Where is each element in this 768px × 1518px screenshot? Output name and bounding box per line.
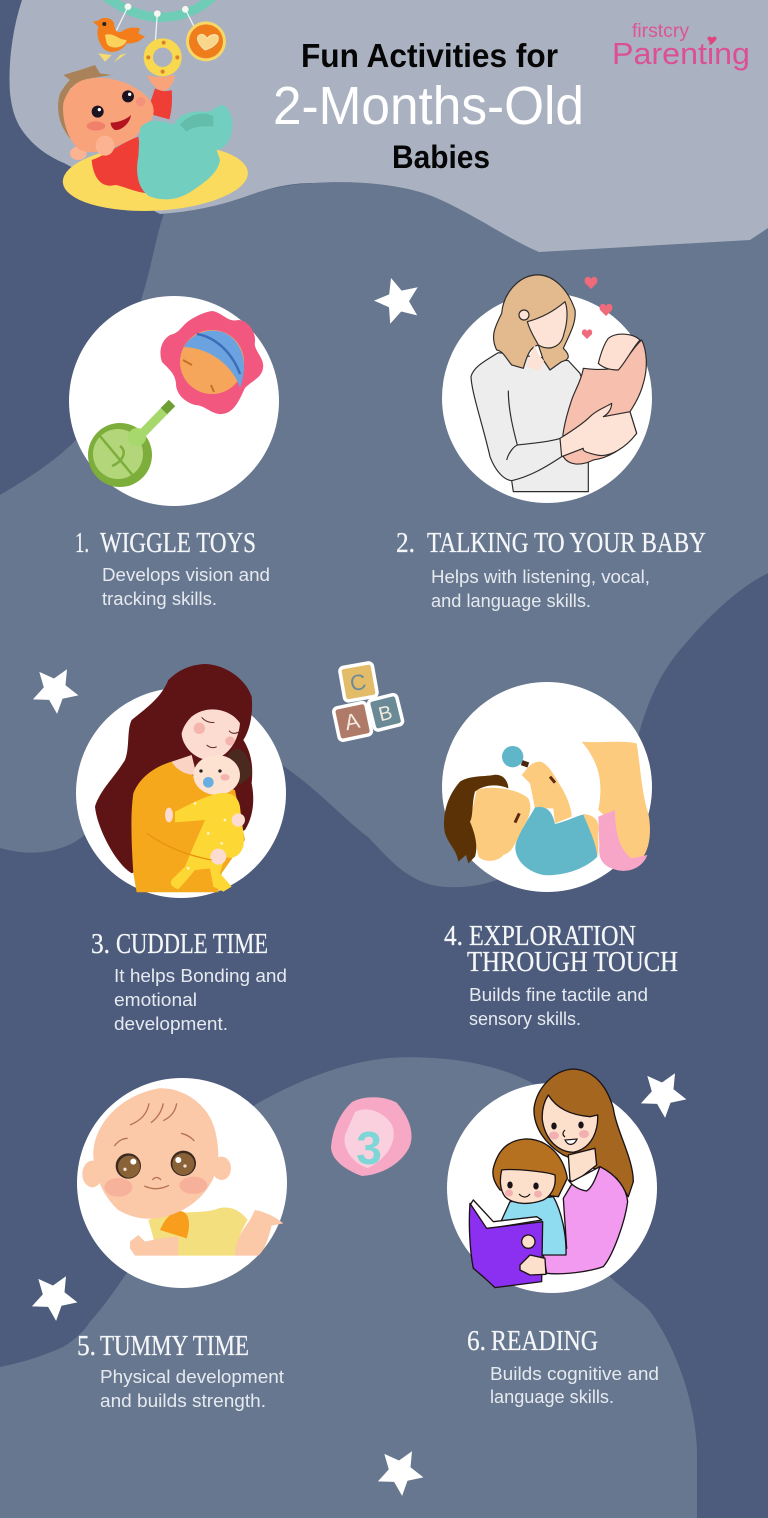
block C: C bbox=[348, 669, 368, 696]
baby head bbox=[193, 755, 240, 795]
hair bbox=[494, 275, 575, 370]
child shirt bbox=[502, 1197, 566, 1255]
description 1: tracking skills. bbox=[102, 589, 217, 609]
head bbox=[63, 78, 154, 152]
description 3: It helps Bonding and bbox=[114, 966, 287, 986]
rattle ball bbox=[502, 746, 523, 767]
icon: star bbox=[33, 669, 78, 714]
leg bbox=[582, 742, 650, 861]
background: upper mid fill bbox=[150, 182, 768, 300]
knee shade bbox=[180, 114, 213, 132]
child hand bbox=[522, 1235, 535, 1248]
circle bbox=[442, 293, 652, 503]
neck bbox=[568, 1148, 597, 1183]
description 5: Physical development bbox=[100, 1367, 284, 1387]
description 4: Builds fine tactile and bbox=[469, 985, 648, 1005]
neck bbox=[172, 755, 197, 775]
description 3: emotional bbox=[114, 990, 197, 1010]
block B: B bbox=[376, 702, 395, 726]
description 6: language skills. bbox=[490, 1387, 614, 1407]
mobile strings bbox=[115, 7, 200, 42]
cheek bbox=[87, 121, 105, 131]
leg bbox=[235, 1210, 283, 1256]
collar bbox=[568, 1167, 600, 1191]
heading 4: 4. bbox=[444, 921, 463, 952]
panel 2: talking to your baby bbox=[396, 275, 706, 611]
hand bbox=[560, 403, 637, 457]
shirt bbox=[515, 807, 597, 875]
rattle bbox=[522, 763, 528, 765]
block A: A bbox=[342, 708, 362, 735]
book bbox=[469, 1203, 543, 1288]
finger shade bbox=[550, 777, 555, 783]
description 3: development. bbox=[114, 1014, 228, 1034]
logo: parenting: Parenting bbox=[612, 36, 750, 71]
icon: star bbox=[374, 278, 418, 324]
baby hair bbox=[227, 749, 252, 785]
head bbox=[470, 788, 530, 861]
heading 5: 5. bbox=[77, 1331, 96, 1362]
heading 3: 3. bbox=[91, 929, 110, 960]
heading 2: TALKING TO YOUR BABY bbox=[427, 528, 706, 559]
cheek right bbox=[136, 97, 145, 106]
face lines bbox=[202, 717, 241, 748]
description 2 bbox=[431, 567, 650, 611]
icon: star bbox=[32, 1276, 77, 1321]
diaper bbox=[598, 810, 647, 871]
sweater bbox=[471, 353, 588, 492]
face bbox=[182, 709, 240, 760]
head bbox=[93, 1088, 218, 1219]
illustration: baby on tummy bbox=[82, 1088, 283, 1256]
legs bbox=[137, 105, 233, 199]
baby features bbox=[199, 769, 230, 788]
icon: alphabet blocks bbox=[333, 662, 403, 741]
mother hand bbox=[520, 1255, 546, 1275]
panel 4: exploration through touch bbox=[442, 682, 678, 1029]
eyes bbox=[116, 1151, 196, 1179]
circle bbox=[442, 682, 652, 892]
hands bbox=[165, 808, 245, 865]
hip bbox=[583, 814, 599, 857]
mother face bbox=[542, 1095, 598, 1152]
heading 3: CUDDLE TIME bbox=[116, 929, 268, 960]
mouth bbox=[515, 813, 519, 823]
heading 6: 6. bbox=[467, 1326, 486, 1357]
child hair bbox=[493, 1139, 567, 1197]
heading 6: READING bbox=[491, 1326, 598, 1357]
hair bbox=[58, 65, 112, 140]
illustration: mother reading with child bbox=[469, 1069, 633, 1288]
description 1: Develops vision and bbox=[102, 565, 270, 585]
logo bbox=[612, 21, 750, 71]
icon: hearts bbox=[582, 277, 612, 339]
die body bbox=[331, 1097, 412, 1176]
hand up bbox=[147, 75, 175, 91]
body bbox=[92, 137, 147, 193]
sweater bbox=[131, 762, 245, 892]
circle bbox=[69, 296, 279, 506]
sleeve bbox=[160, 1211, 189, 1238]
heading 4: EXPLORATION bbox=[469, 921, 636, 952]
panel 5: tummy time bbox=[77, 1078, 287, 1411]
background: lower wave bbox=[0, 1057, 697, 1518]
title line 3: Babies bbox=[392, 139, 490, 175]
blush bbox=[104, 1177, 207, 1197]
illustration: mother and newborn bbox=[471, 275, 646, 492]
toy: heart disc bbox=[186, 21, 226, 61]
shirt bbox=[148, 1207, 248, 1256]
description 6 bbox=[490, 1364, 659, 1407]
description 5: and builds strength. bbox=[100, 1391, 266, 1411]
die face bbox=[345, 1109, 394, 1168]
toy: bird bbox=[93, 18, 145, 62]
panel 6: reading bbox=[447, 1069, 659, 1407]
face lines bbox=[114, 1103, 194, 1189]
die number: 3 bbox=[356, 1122, 382, 1174]
arm up bbox=[150, 88, 172, 119]
arm bbox=[522, 762, 572, 823]
heading 5: TUMMY TIME bbox=[100, 1331, 249, 1362]
heading 1: WIGGLE TOYS bbox=[100, 528, 256, 559]
heading 4: THROUGH TOUCH bbox=[467, 947, 678, 978]
description 1 bbox=[102, 565, 270, 609]
mouth bbox=[111, 115, 131, 130]
panel 3: cuddle time bbox=[76, 664, 287, 1034]
baby body bbox=[171, 793, 244, 892]
panel 1: wiggle toys bbox=[69, 296, 279, 609]
heading 2: 2. bbox=[396, 528, 415, 559]
title bbox=[273, 37, 584, 175]
dots bbox=[187, 802, 226, 870]
book pages bbox=[470, 1200, 542, 1229]
title line 1: Fun Activities for bbox=[301, 37, 558, 74]
toy: ring bbox=[146, 41, 179, 74]
description 3 bbox=[114, 966, 287, 1034]
description 2: and language skills. bbox=[431, 591, 591, 611]
description 5 bbox=[100, 1367, 284, 1411]
circle bbox=[76, 688, 286, 898]
description 4 bbox=[469, 985, 648, 1029]
icon: number die bbox=[331, 1097, 412, 1176]
cheeks bbox=[194, 723, 235, 746]
sweater bbox=[543, 1167, 628, 1274]
heading 4 bbox=[444, 921, 678, 978]
mobile dots bbox=[125, 3, 189, 17]
neck bbox=[526, 345, 544, 371]
arm shadow bbox=[147, 833, 212, 860]
logo: heart bbox=[707, 37, 717, 44]
illustration: baby with mobile bbox=[58, 0, 250, 215]
background: middle wave bbox=[0, 213, 768, 887]
sleeve lines bbox=[507, 391, 562, 481]
cushion bbox=[61, 139, 250, 215]
icon: rattle bbox=[88, 311, 263, 487]
logo: firstcry: firstcry bbox=[632, 21, 690, 42]
child face bbox=[500, 1170, 555, 1203]
description 4: sensory skills. bbox=[469, 1009, 581, 1029]
circle bbox=[447, 1083, 657, 1293]
arm bbox=[130, 1235, 178, 1256]
icon: star bbox=[378, 1451, 423, 1496]
hair bbox=[444, 775, 508, 863]
ear bbox=[519, 310, 529, 320]
title line 2: 2-Months-Old bbox=[273, 76, 584, 136]
baby wrap bbox=[562, 340, 646, 464]
circle bbox=[77, 1078, 287, 1288]
description 6: Builds cognitive and bbox=[490, 1364, 659, 1384]
baby face bbox=[598, 334, 640, 370]
illustration: mother cuddling baby bbox=[95, 664, 253, 892]
mother hair bbox=[534, 1069, 633, 1197]
heading 1: 1. bbox=[75, 528, 89, 559]
hand near mouth bbox=[96, 136, 114, 156]
background: light header shape bbox=[10, 0, 768, 252]
face bbox=[527, 302, 567, 348]
description 2: Helps with listening, vocal, bbox=[431, 567, 650, 587]
mobile arc bbox=[105, 0, 213, 17]
ear bbox=[70, 147, 87, 160]
eyes bbox=[92, 90, 134, 118]
hair bbox=[95, 664, 253, 873]
illustration: baby reaching for rattle bbox=[444, 742, 650, 875]
faces bbox=[505, 1122, 589, 1198]
icon: star bbox=[641, 1073, 686, 1118]
ears bbox=[82, 1157, 231, 1187]
